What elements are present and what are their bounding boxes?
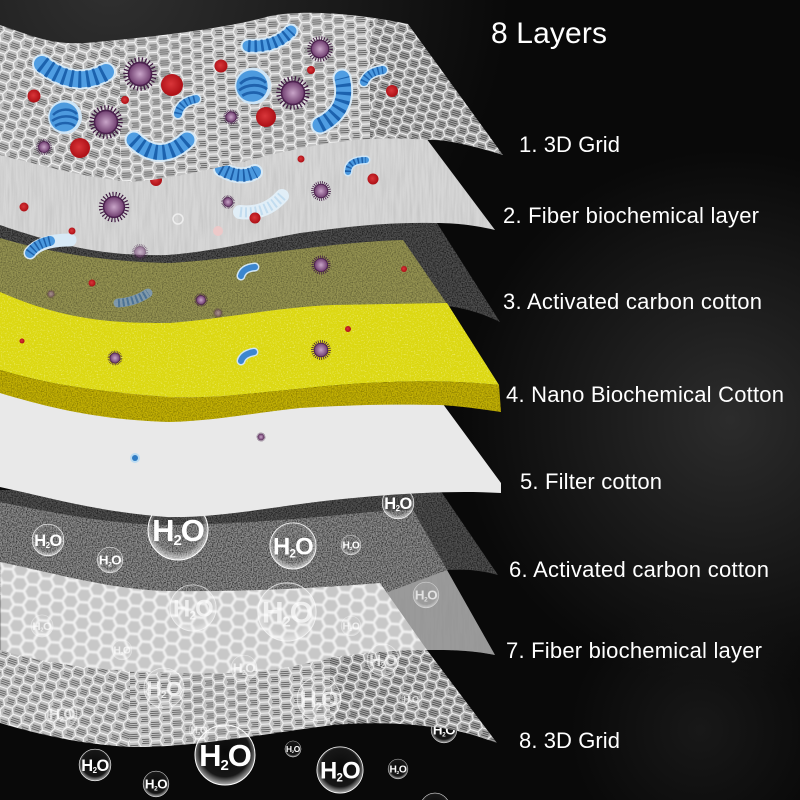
bubble: 2 [290,549,296,561]
virus [225,111,237,123]
water bubbles on layers 7 and 8 [31,582,439,740]
virus [214,309,222,317]
layer 7: fiber biochemical layer, transparent right side [386,570,495,655]
virus [196,295,206,305]
virus [48,290,54,298]
bubble [270,523,316,569]
bubble [285,741,301,757]
water bubbles falling below the layers [79,725,450,800]
red cell [250,212,260,224]
bubble: O [63,706,75,724]
bubble: H [233,661,242,676]
bubble: H [152,513,173,548]
bubble: O [43,621,52,633]
bubble: H [389,765,397,776]
bubble: H [342,622,350,633]
bacterium [241,352,254,361]
bubble: 2 [350,627,353,633]
bacterium [134,140,187,152]
red cell [70,138,90,158]
virus [102,195,126,219]
bacterium [42,64,106,79]
layer 7: honeycomb section [0,562,427,674]
bubble: O [290,597,313,630]
bubble [402,690,420,708]
red cell [256,107,276,127]
label 6: 6. Activated carbon cotton [509,557,769,582]
bacterium [248,31,291,46]
bubble [144,668,184,708]
bubble [112,640,132,660]
water bubble behind layer 8: H [433,723,442,738]
virus [223,197,233,207]
bubble: H [273,533,290,560]
virus [38,141,50,153]
bubble: 2 [121,651,124,657]
bubble: O [399,495,412,513]
red cell [68,228,76,234]
bubble: 2 [93,766,98,775]
bubble: O [427,588,437,603]
bubble: H [81,757,93,775]
red cell [386,85,398,97]
bubble: H [145,777,154,792]
red cell [214,60,228,72]
layer 3: activated carbon cotton [0,222,500,323]
bubble: H [415,588,424,603]
red cell [368,174,378,184]
label 1: 1. 3D Grid [519,132,620,157]
bubble: H [113,646,121,657]
bubble [148,500,208,560]
label 8: 8. 3D Grid [519,728,620,753]
bubble: O [200,726,208,737]
bubble: O [111,553,121,568]
bubble: 2 [381,661,386,670]
bubble [367,644,399,676]
bubble: 2 [337,773,343,785]
bubble: H [199,738,220,773]
bubble: O [228,738,251,773]
red cell [150,174,162,186]
virus [109,352,121,364]
bubble: 2 [220,757,228,774]
bubble: 2 [60,714,64,724]
virus [93,109,119,135]
red cell [307,66,315,74]
red cell [20,338,24,344]
red cell [298,156,304,162]
virus [313,183,329,199]
red cell [28,90,40,102]
bubble: O [294,744,301,754]
bubble: 2 [396,504,401,513]
bacterium [348,160,366,172]
bubble: 2 [190,611,196,623]
bubble: H [384,495,396,513]
bubble: O [96,757,109,775]
red cell [345,326,351,332]
bubble [189,720,209,740]
bubble [382,487,414,519]
layer 4 germs [20,326,351,364]
bubble: H [32,621,40,633]
layer 6: activated carbon cotton [0,485,500,600]
layer 3 germs [48,258,407,317]
bubble: 2 [292,749,295,754]
bubble [47,699,77,729]
virus [280,80,306,106]
layer 4: nano biochemical cotton [0,285,505,425]
bubble: H [99,553,108,568]
label 4: 4. Nano Biochemical Cotton [506,382,784,407]
bubble: 2 [283,615,291,631]
bubble: 2 [350,546,353,552]
bacterium [178,99,196,114]
bubble: H [190,726,198,737]
virus faded [134,246,146,258]
bubble: 2 [424,596,428,603]
bacterium faded [118,293,148,303]
bubble: 2 [242,669,246,676]
red cell [121,96,129,104]
ghost cell [173,214,183,224]
bubble: 2 [108,561,112,568]
bubble: O [342,757,360,784]
layer 5: filter cotton [0,390,501,517]
red cell [401,266,407,272]
bacterium [241,267,255,276]
bubble: H [34,532,46,550]
layer 1: 3D grid [0,12,503,182]
water bubble behind layer 8: O [445,723,455,738]
water bubble behind layer 8 [431,717,457,743]
layer 2: fiber biochemical layer [0,138,495,256]
water bubble behind layer 8: 2 [442,731,446,738]
bacterium [364,70,383,82]
bacterium [221,169,255,175]
bubble [31,615,53,637]
bubble: O [384,652,397,670]
virus [310,39,330,59]
red cell [20,202,28,212]
virus [127,61,153,87]
layer labels [503,132,784,753]
bubble [97,547,123,573]
bubble: O [166,677,182,700]
layer 8: 3D grid [0,650,497,747]
bubble: H [300,687,316,712]
bubble: O [399,765,407,776]
bubble [32,524,64,556]
bubble [231,655,257,681]
bubble [143,771,169,797]
water bubbles on layer 6 [32,487,414,573]
bubble [341,535,361,555]
bubble: O [195,595,213,622]
bubble [413,582,439,608]
layer 1 germs [28,31,398,158]
bubble: 2 [316,701,322,713]
bubble: O [352,622,360,633]
bubble: 2 [154,785,158,792]
bubble: O [181,513,204,548]
bubble: O [123,646,131,657]
layer 5 germs [130,434,264,463]
red cell [88,280,96,286]
bubble [388,759,408,779]
bubble: O [49,532,62,550]
bubble: H [49,706,60,724]
bubble: H [147,677,161,700]
label 3: 3. Activated carbon cotton [503,289,762,314]
ghost cell [213,226,223,236]
bubble: 2 [40,628,43,634]
bubble: O [157,777,167,792]
bubble: H [262,597,283,630]
top face [0,285,505,400]
bubble: O [352,541,360,552]
bubble: O [245,661,255,676]
bubble: O [321,687,338,712]
bubble: O [295,533,313,560]
bubble: H [173,595,190,622]
bubble: H [320,757,337,784]
bubble [258,583,316,641]
bubble: 2 [410,700,413,705]
bacterium pale [240,196,282,212]
red cell [161,74,183,96]
label 5: 5. Filter cotton [520,469,662,494]
label 7: 7. Fiber biochemical layer [506,638,762,663]
bubble: 2 [46,541,51,550]
bubble: H [286,744,292,754]
coiled bacterium [235,68,271,104]
bubble: H [342,541,350,552]
bubble [317,747,363,793]
bacterium [320,78,344,125]
bacterium half pale [30,240,70,253]
bubble [79,749,111,781]
bubble [195,725,255,785]
coiled bacterium [48,100,82,134]
bubble: 2 [173,532,181,549]
bubble [341,616,361,636]
virus [313,342,329,358]
bubble [420,793,450,800]
virus [314,258,328,272]
bubble [170,585,216,631]
bubble: H [403,694,410,704]
bacterium [130,453,140,463]
bubble: H [369,652,381,670]
bubble: 2 [198,731,201,737]
bubble: 2 [397,770,400,776]
virus [258,434,264,440]
title: 8 Layers [491,17,607,50]
label 2: 2. Fiber biochemical layer [503,203,759,228]
bubble: O [412,694,419,704]
bubble: 2 [161,690,167,701]
bubble [297,677,341,721]
side face [0,370,501,422]
layer 2 germs [20,156,378,258]
